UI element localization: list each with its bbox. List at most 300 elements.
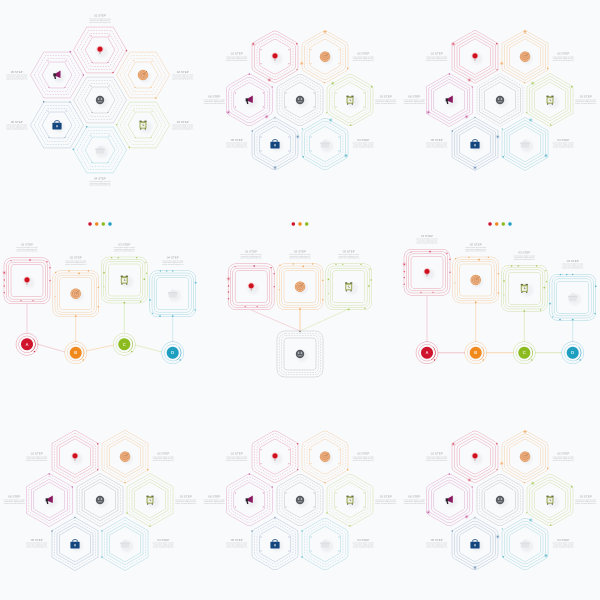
- label: 02 step: sed do eiusmod tempor inci: [553, 59, 575, 62]
- label: 03 step: 03 STEP: [380, 495, 392, 499]
- square: step 1 red: [2, 258, 51, 304]
- label: 04 step: consectetur adipiscing elit,: [553, 544, 574, 546]
- label: 01 step: Lorem ipsum dolor sit amet,: [416, 238, 438, 241]
- label: 01 step: consectetur adipiscing elit,: [226, 57, 247, 60]
- label: 01 step: [416, 234, 438, 244]
- label: 02 step: 02 STEP: [294, 249, 306, 253]
- label: 02 step: sed do eiusmod tempor inci: [289, 257, 311, 260]
- label: 06 step: 06 STEP: [208, 495, 220, 499]
- label: 02 step: [65, 256, 87, 266]
- label: 02 step: 02 STEP: [557, 452, 569, 456]
- label: 06 step: sed do eiusmod tempor inci: [404, 102, 426, 105]
- label: 05 step: Lorem ipsum dolor sit amet,: [226, 542, 248, 545]
- label: 04 step: 04 STEP: [357, 138, 369, 142]
- label: 03 step: Lorem ipsum dolor sit amet,: [338, 253, 360, 256]
- square: step 3 green: [101, 257, 147, 304]
- label: 02 step: sed do eiusmod tempor inci: [353, 459, 375, 462]
- label: 02 step: consectetur adipiscing elit,: [65, 261, 86, 264]
- hexagon: step 2 orange: [500, 430, 548, 483]
- hexagon: step 5 blue: [30, 101, 84, 148]
- label: 06 step: [404, 495, 426, 505]
- hexagon: step 6 mauve: [26, 473, 73, 527]
- node C: [113, 333, 135, 355]
- label: 04 step: Lorem ipsum dolor sit amet,: [89, 180, 111, 183]
- hexagon: step 5 blue: [452, 117, 500, 171]
- label: 01 step: Lorem ipsum dolor sit amet,: [426, 55, 448, 58]
- label: 02 step: 02 STEP: [70, 256, 82, 260]
- label: 02 step: Lorem ipsum dolor sit amet,: [289, 253, 311, 256]
- label: 03 step: Lorem ipsum dolor sit amet,: [375, 498, 397, 501]
- connector lines: [251, 309, 349, 331]
- node A: [416, 342, 438, 364]
- hexagon: step 6 mauve: [30, 51, 84, 98]
- label: 02 step: Lorem ipsum dolor sit amet,: [353, 455, 375, 458]
- label: 02 step: Lorem ipsum dolor sit amet,: [465, 246, 487, 249]
- label: 05 step: sed do eiusmod tempor inci: [426, 145, 448, 148]
- label: 01 step: 01 STEP: [431, 52, 443, 56]
- label: 01 step: 01 STEP: [231, 52, 243, 56]
- label: 02 step: Lorem ipsum dolor sit amet,: [153, 455, 175, 458]
- label: 05 step: [226, 538, 248, 548]
- hexagon: centre grey: [74, 77, 126, 123]
- label: 01 step: consectetur adipiscing elit,: [226, 457, 247, 460]
- label: 05 step: [6, 120, 28, 130]
- hexagon: centre grey: [477, 73, 523, 127]
- label: 05 step: sed do eiusmod tempor inci: [226, 145, 248, 148]
- label: 03 step: consectetur adipiscing elit,: [575, 500, 596, 503]
- hexagon: step 3 green: [526, 474, 573, 526]
- label: 05 step: 05 STEP: [431, 538, 443, 542]
- label: 05 step: [426, 138, 448, 148]
- panel: rounded solid hexagons, bottom right: [404, 430, 597, 570]
- label: 06 step: Lorem ipsum dolor sit amet,: [204, 98, 226, 101]
- label: 06 step: sed do eiusmod tempor inci: [404, 502, 426, 505]
- hexagon: step 5 blue: [452, 517, 500, 570]
- label: 01 step: [26, 452, 48, 462]
- label: 03 step: [172, 120, 194, 130]
- label: 02 step: consectetur adipiscing elit,: [153, 457, 174, 460]
- label: 02 step: [353, 52, 375, 62]
- label: 06 step: sed do eiusmod tempor inci: [6, 77, 28, 80]
- label: 01 step: sed do eiusmod tempor inci: [26, 459, 48, 462]
- label: 06 step: sed do eiusmod tempor inci: [204, 502, 226, 505]
- label: 02 step: sed do eiusmod tempor inci: [465, 250, 487, 253]
- label: 01 step: 01 STEP: [421, 234, 433, 238]
- label: 06 step: [6, 70, 28, 80]
- panel: six-step flat hexagons, top left: [6, 14, 194, 187]
- label: 03 step: [375, 95, 397, 105]
- legend dots: [292, 222, 308, 226]
- label: 05 step: consectetur adipiscing elit,: [226, 144, 247, 146]
- square: step 1 red: [402, 249, 451, 295]
- label: 01 step: [426, 452, 448, 462]
- panel: three squares converging on one, middle centre: [226, 222, 372, 377]
- hexagon: step 2 orange: [302, 431, 348, 483]
- square: step 2 orange: [277, 263, 323, 310]
- label: 03 step: sed do eiusmod tempor inci: [514, 258, 536, 261]
- label: 04 step: 04 STEP: [357, 538, 369, 542]
- label: 04 step: sed do eiusmod tempor inci: [562, 266, 584, 269]
- label: 04 step: Lorem ipsum dolor sit amet,: [553, 542, 575, 545]
- label: 06 step: [204, 95, 226, 105]
- label: 04 step: [153, 538, 175, 548]
- label: 02 step: consectetur adipiscing elit,: [465, 248, 486, 251]
- label: 01 step: [426, 52, 448, 62]
- square: step 4 teal: [549, 274, 597, 320]
- label: 02 step: 02 STEP: [470, 242, 482, 246]
- hexagon: step 1 red: [252, 431, 298, 483]
- label: 05 step: consectetur adipiscing elit,: [26, 544, 47, 546]
- node C: [513, 342, 535, 364]
- label: 05 step: Lorem ipsum dolor sit amet,: [226, 142, 248, 145]
- label: 01 step: 01 STEP: [31, 452, 43, 456]
- label: 01 step: Lorem ipsum dolor sit amet,: [26, 455, 48, 458]
- label: 03 step: consectetur adipiscing elit,: [114, 248, 135, 251]
- label: 03 step: Lorem ipsum dolor sit amet,: [172, 124, 194, 127]
- label: 03 step: Lorem ipsum dolor sit amet,: [114, 246, 136, 249]
- label: 04 step: [353, 538, 375, 548]
- label: 02 step: Lorem ipsum dolor sit amet,: [172, 74, 194, 77]
- node B: B: [474, 350, 477, 355]
- panel: four squares with zigzag letter nodes, middle left: [2, 222, 197, 364]
- label: 05 step: [426, 538, 448, 548]
- label: 06 step: 06 STEP: [208, 95, 220, 99]
- label: 04 step: Lorem ipsum dolor sit amet,: [353, 542, 375, 545]
- hexagon: step 6 mauve: [226, 473, 273, 526]
- label: 03 step: sed do eiusmod tempor inci: [575, 102, 597, 105]
- label: 05 step: Lorem ipsum dolor sit amet,: [426, 542, 448, 545]
- label: 04 step: consectetur adipiscing elit,: [562, 264, 583, 268]
- label: 01 step: consectetur adipiscing elit,: [26, 457, 47, 460]
- node A: A: [425, 350, 429, 355]
- label: 03 step: Lorem ipsum dolor sit amet,: [575, 98, 597, 101]
- hexagon: step 4 teal: [72, 126, 126, 173]
- label: 06 step: Lorem ipsum dolor sit amet,: [404, 98, 426, 101]
- label: 02 step: consectetur adipiscing elit,: [353, 457, 374, 460]
- hexagon: step 4 teal: [302, 118, 348, 170]
- label: 01 step: 01 STEP: [94, 14, 106, 18]
- label: 02 step: sed do eiusmod tempor inci: [353, 59, 375, 62]
- square: step 2 orange: [53, 270, 99, 317]
- label: 02 step: 02 STEP: [357, 452, 369, 456]
- label: 01 step: Lorem ipsum dolor sit amet,: [89, 17, 111, 20]
- label: 04 step: consectetur adipiscing elit,: [162, 261, 183, 264]
- label: 04 step: [562, 259, 584, 269]
- label: 02 step: 02 STEP: [177, 70, 189, 74]
- label: 04 step: [162, 256, 184, 266]
- label: 06 step: 06 STEP: [408, 95, 420, 99]
- label: 01 step: sed do eiusmod tempor inci: [16, 250, 38, 253]
- label: 04 step: [553, 138, 575, 148]
- label: 03 step: [175, 495, 197, 505]
- hexagon: step 4 teal: [502, 518, 548, 570]
- label: 02 step: Lorem ipsum dolor sit amet,: [65, 259, 87, 262]
- label: 03 step: 03 STEP: [118, 242, 130, 246]
- label: 05 step: consectetur adipiscing elit,: [426, 544, 447, 546]
- label: 02 step: Lorem ipsum dolor sit amet,: [353, 55, 375, 58]
- label: 02 step: [153, 452, 175, 462]
- label: 04 step: consectetur adipiscing elit,: [153, 544, 174, 546]
- label: 03 step: consectetur adipiscing elit,: [375, 500, 396, 503]
- label: 04 step: sed do eiusmod tempor inci: [353, 545, 375, 548]
- hexagon: step 6 mauve: [426, 73, 473, 127]
- connector lines: [427, 296, 573, 353]
- label: 03 step: sed do eiusmod tempor inci: [375, 502, 397, 505]
- hexagon: step 5 blue: [252, 117, 300, 170]
- label: 06 step: Lorem ipsum dolor sit amet,: [204, 498, 226, 501]
- label: 03 step: 03 STEP: [343, 249, 355, 253]
- label: 04 step: 04 STEP: [157, 538, 169, 542]
- node D: D: [571, 350, 574, 355]
- label: 06 step: consectetur adipiscing elit,: [204, 500, 225, 503]
- label: 02 step: [353, 452, 375, 462]
- hexagon: step 1 red: [451, 30, 498, 83]
- label: 04 step: sed do eiusmod tempor inci: [553, 145, 575, 148]
- label: 06 step: consectetur adipiscing elit,: [404, 100, 425, 103]
- label: 01 step: [240, 249, 262, 260]
- label: 05 step: 05 STEP: [31, 538, 43, 542]
- label: 06 step: consectetur adipiscing elit,: [404, 500, 425, 503]
- label: 03 step: Lorem ipsum dolor sit amet,: [375, 98, 397, 101]
- label: 06 step: consectetur adipiscing elit,: [6, 76, 27, 78]
- label: 01 step: consectetur adipiscing elit,: [417, 240, 438, 242]
- panel: descending squares with letter timeline, middle right: [402, 222, 597, 364]
- label: 06 step: 06 STEP: [8, 495, 20, 499]
- label: 04 step: Lorem ipsum dolor sit amet,: [553, 142, 575, 145]
- label: 06 step: 06 STEP: [408, 495, 420, 499]
- label: 01 step: [16, 242, 38, 253]
- hexagon: step 2 orange: [300, 30, 348, 83]
- hexagon: step 4 teal: [101, 517, 148, 571]
- node D: D: [171, 350, 174, 355]
- label: 04 step: sed do eiusmod tempor inci: [153, 545, 175, 548]
- label: 06 step: Lorem ipsum dolor sit amet,: [404, 498, 426, 501]
- label: 05 step: 05 STEP: [231, 538, 243, 542]
- label: 05 step: Lorem ipsum dolor sit amet,: [6, 124, 28, 127]
- label: 03 step: [338, 249, 360, 260]
- panel: rounded dashed hexagons, bottom centre: [204, 431, 397, 570]
- label: 03 step: [514, 251, 536, 261]
- panel: sharp dashed hexagons, bottom left: [4, 430, 197, 571]
- label: 03 step: 03 STEP: [580, 95, 592, 99]
- label: 05 step: [26, 538, 48, 548]
- square: step 3 green: [326, 264, 372, 310]
- hexagon: step 3 green: [116, 102, 170, 148]
- label: 04 step: 04 STEP: [557, 138, 569, 142]
- square: step 2 orange: [453, 257, 499, 303]
- label: 02 step: sed do eiusmod tempor inci: [553, 459, 575, 462]
- label: 03 step: consectetur adipiscing elit,: [172, 126, 193, 128]
- label: 01 step: consectetur adipiscing elit,: [241, 255, 262, 258]
- label: 04 step: 04 STEP: [94, 176, 106, 180]
- label: 01 step: 01 STEP: [21, 242, 33, 246]
- label: 05 step: sed do eiusmod tempor inci: [6, 127, 28, 130]
- label: 05 step: 05 STEP: [231, 138, 243, 142]
- label: 03 step: 03 STEP: [180, 495, 192, 499]
- label: 03 step: consectetur adipiscing elit,: [338, 255, 359, 258]
- node C: C: [523, 350, 526, 355]
- label: 05 step: sed do eiusmod tempor inci: [426, 545, 448, 548]
- label: 01 step: consectetur adipiscing elit,: [17, 248, 38, 251]
- label: 01 step: [226, 452, 248, 462]
- label: 04 step: 04 STEP: [167, 256, 179, 260]
- label: 01 step: sed do eiusmod tempor inci: [226, 459, 248, 462]
- label: 04 step: sed do eiusmod tempor inci: [353, 145, 375, 148]
- label: 02 step: Lorem ipsum dolor sit amet,: [553, 455, 575, 458]
- label: 01 step: consectetur adipiscing elit,: [426, 457, 447, 460]
- label: 03 step: [114, 242, 136, 253]
- label: 04 step: [89, 176, 111, 187]
- hexagon: step 4 teal: [502, 117, 548, 171]
- label: 01 step: [89, 14, 111, 24]
- label: 02 step: 02 STEP: [157, 452, 169, 456]
- label: 05 step: Lorem ipsum dolor sit amet,: [426, 142, 448, 145]
- node B: B: [74, 350, 77, 355]
- label: 02 step: sed do eiusmod tempor inci: [172, 77, 194, 80]
- label: 01 step: sed do eiusmod tempor inci: [240, 257, 262, 260]
- connector lines: [27, 303, 173, 352]
- label: 01 step: 01 STEP: [231, 452, 243, 456]
- label: 01 step: sed do eiusmod tempor inci: [416, 241, 438, 244]
- label: 06 step: sed do eiusmod tempor inci: [204, 102, 226, 105]
- label: 04 step: consectetur adipiscing elit,: [353, 144, 374, 146]
- label: 04 step: [353, 138, 375, 148]
- label: 04 step: [553, 538, 575, 548]
- label: 03 step: 03 STEP: [380, 95, 392, 99]
- hexagon: centre grey: [277, 474, 323, 526]
- hexagon: step 6 mauve: [226, 73, 273, 126]
- label: 03 step: sed do eiusmod tempor inci: [338, 257, 360, 260]
- square: step 3 green: [501, 265, 547, 312]
- hexagon: step 1 red: [451, 431, 498, 483]
- label: 01 step: Lorem ipsum dolor sit amet,: [226, 55, 248, 58]
- label: 01 step: 01 STEP: [245, 249, 257, 253]
- node B: [465, 342, 487, 364]
- hexagon: step 3 green: [326, 474, 373, 527]
- label: 02 step: [553, 52, 575, 62]
- label: 06 step: [404, 95, 426, 105]
- square: step 1 red: [226, 264, 275, 310]
- label: 02 step: consectetur adipiscing elit,: [290, 255, 311, 258]
- label: 03 step: sed do eiusmod tempor inci: [175, 502, 197, 505]
- label: 03 step: consectetur adipiscing elit,: [514, 256, 535, 259]
- label: 05 step: consectetur adipiscing elit,: [226, 544, 247, 546]
- label: 02 step: [289, 249, 311, 260]
- label: 03 step: sed do eiusmod tempor inci: [575, 502, 597, 505]
- legend dots: [88, 222, 112, 226]
- node A: [16, 333, 38, 355]
- label: 04 step: Lorem ipsum dolor sit amet,: [153, 542, 175, 545]
- label: 01 step: Lorem ipsum dolor sit amet,: [226, 455, 248, 458]
- hexagon: centre grey: [277, 74, 323, 126]
- label: 03 step: [375, 495, 397, 505]
- label: 04 step: 04 STEP: [567, 259, 579, 263]
- label: 01 step: sed do eiusmod tempor inci: [426, 59, 448, 62]
- label: 01 step: sed do eiusmod tempor inci: [426, 459, 448, 462]
- legend dots: [488, 222, 512, 226]
- label: 04 step: Lorem ipsum dolor sit amet,: [353, 142, 375, 145]
- label: 03 step: Lorem ipsum dolor sit amet,: [514, 254, 536, 257]
- label: 04 step: sed do eiusmod tempor inci: [553, 545, 575, 548]
- hexagon: centre grey: [77, 473, 123, 527]
- node C: C: [123, 342, 126, 347]
- hexagon: step 3 green: [526, 73, 573, 127]
- label: 02 step: consectetur adipiscing elit,: [553, 57, 574, 60]
- hexagon: step 1 red: [52, 430, 98, 483]
- label: 03 step: 03 STEP: [580, 495, 592, 499]
- label: 03 step: 03 STEP: [518, 251, 530, 255]
- label: 03 step: sed do eiusmod tempor inci: [172, 127, 194, 130]
- label: 05 step: 05 STEP: [431, 138, 443, 142]
- square: step 4 teal: [149, 270, 197, 317]
- label: 02 step: Lorem ipsum dolor sit amet,: [553, 55, 575, 58]
- label: 06 step: Lorem ipsum dolor sit amet,: [6, 74, 28, 77]
- hexagon: step 2 orange: [500, 30, 548, 83]
- label: 03 step: consectetur adipiscing elit,: [375, 100, 396, 103]
- label: 06 step: [4, 495, 26, 505]
- label: 01 step: consectetur adipiscing elit,: [426, 57, 447, 60]
- label: 01 step: 01 STEP: [431, 452, 443, 456]
- hexagon: step 4 teal: [301, 518, 348, 570]
- label: 05 step: Lorem ipsum dolor sit amet,: [26, 542, 48, 545]
- label: 05 step: 05 STEP: [11, 120, 23, 124]
- label: 02 step: consectetur adipiscing elit,: [172, 76, 193, 78]
- label: 04 step: consectetur adipiscing elit,: [553, 144, 574, 146]
- label: 03 step: sed do eiusmod tempor inci: [375, 102, 397, 105]
- hexagon: step 2 orange: [102, 430, 148, 483]
- label: 06 step: consectetur adipiscing elit,: [4, 500, 25, 503]
- hexagon: step 2 orange: [116, 52, 170, 99]
- label: 02 step: 02 STEP: [557, 52, 569, 56]
- label: 05 step: [226, 138, 248, 148]
- node B: [65, 342, 87, 364]
- node D: [162, 342, 184, 364]
- label: 03 step: [575, 495, 597, 505]
- label: 05 step: consectetur adipiscing elit,: [6, 126, 27, 128]
- label: 05 step: consectetur adipiscing elit,: [426, 144, 447, 146]
- label: 03 step: consectetur adipiscing elit,: [575, 100, 596, 103]
- label: 04 step: consectetur adipiscing elit,: [90, 182, 111, 185]
- label: 03 step: 03 STEP: [177, 120, 189, 124]
- label: 01 step: sed do eiusmod tempor inci: [89, 21, 111, 24]
- panel: sharp solid hexagons, top right: [404, 30, 597, 171]
- label: 02 step: sed do eiusmod tempor inci: [65, 263, 87, 266]
- hexagon: step 1 red: [251, 31, 298, 83]
- label: 02 step: sed do eiusmod tempor inci: [153, 459, 175, 462]
- label: 06 step: sed do eiusmod tempor inci: [4, 502, 26, 505]
- node A: A: [25, 342, 29, 347]
- label: 02 step: [172, 70, 194, 80]
- hexagon: step 3 green: [126, 473, 173, 527]
- label: 06 step: 06 STEP: [11, 70, 23, 74]
- label: 01 step: Lorem ipsum dolor sit amet,: [240, 253, 262, 256]
- label: 04 step: sed do eiusmod tempor inci: [162, 263, 184, 266]
- label: 02 step: 02 STEP: [357, 52, 369, 56]
- label: 01 step: Lorem ipsum dolor sit amet,: [16, 246, 38, 249]
- label: 01 step: Lorem ipsum dolor sit amet,: [426, 455, 448, 458]
- label: 03 step: [575, 95, 597, 105]
- label: 05 step: sed do eiusmod tempor inci: [226, 545, 248, 548]
- label: 04 step: Lorem ipsum dolor sit amet,: [562, 263, 584, 266]
- hexagon: step 6 mauve: [426, 473, 473, 526]
- hexagon: centre grey: [477, 474, 523, 526]
- hexagon: step 5 blue: [51, 517, 98, 571]
- hexagon: step 5 blue: [251, 517, 298, 570]
- label: 04 step: consectetur adipiscing elit,: [353, 544, 374, 546]
- label: 01 step: sed do eiusmod tempor inci: [226, 59, 248, 62]
- panel: rounded hexagons with dots, top centre: [204, 30, 397, 170]
- hexagon: step 3 green: [326, 74, 373, 126]
